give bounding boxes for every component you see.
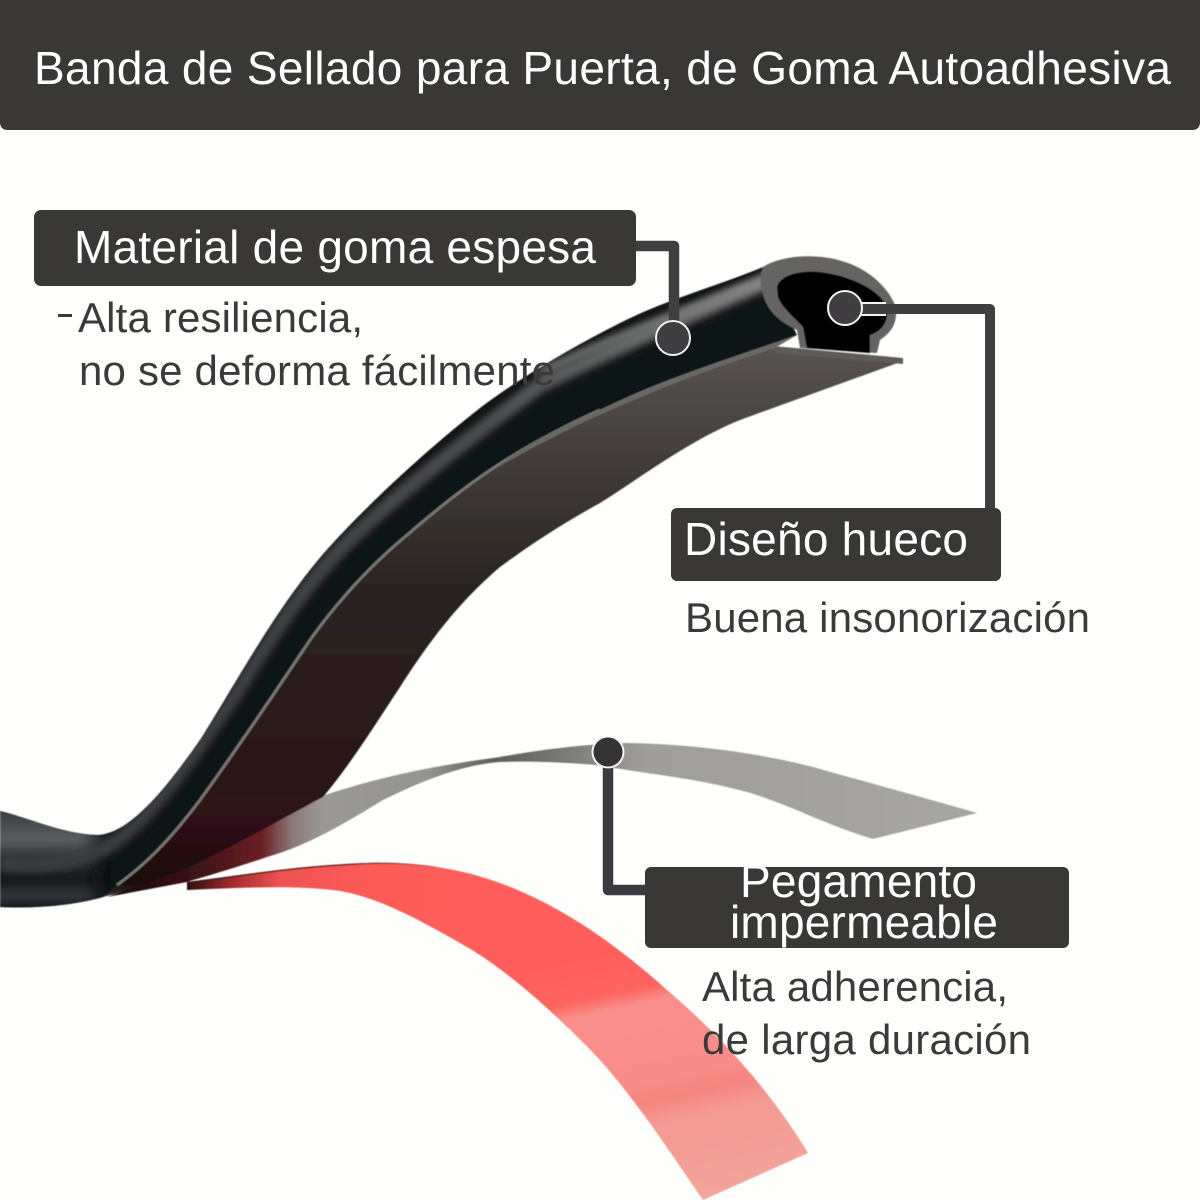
label text: Pegamento [740, 855, 977, 907]
callout: diseño hueco [671, 291, 1090, 641]
callout: pegamento impermeable [592, 736, 1069, 1063]
label text: impermeable [730, 896, 998, 948]
gray backing film [107, 743, 977, 897]
label text: Material de goma espesa [74, 221, 596, 273]
marker dot [592, 736, 624, 768]
connector line [608, 760, 650, 890]
connector halo [845, 302, 886, 316]
description: Alta adherencia, [702, 963, 1008, 1010]
base edge strip [773, 346, 903, 364]
tube end: outer rim [761, 256, 896, 353]
gray seam line [117, 410, 600, 885]
description: Buena insonorización [685, 594, 1090, 641]
header bar [0, 0, 1200, 130]
title: Banda de Sellado para Puerta, de Goma Autoadhesiva [34, 42, 1171, 94]
label box [645, 867, 1069, 948]
description: de larga duración [702, 1016, 1031, 1063]
seam band near tube end [500, 335, 797, 466]
description: Alta resiliencia, [78, 294, 363, 341]
callout: material de goma espesa [34, 210, 690, 394]
label text: Diseño hueco [684, 513, 968, 565]
flat adhesive base [103, 335, 903, 897]
tube end: hollow cavity [777, 272, 887, 353]
label box [671, 508, 1001, 581]
marker dot [656, 321, 690, 355]
connector line [630, 246, 674, 335]
description dash [58, 314, 72, 317]
label box [34, 210, 636, 286]
label text [730, 855, 998, 948]
illustration: sealing strip [0, 256, 977, 1200]
red adhesive liner [180, 850, 820, 1200]
rubber tube body [0, 267, 797, 907]
description: no se deforma fácilmente [79, 347, 555, 394]
description [78, 294, 555, 394]
tube highlights [0, 277, 770, 910]
marker dot [828, 291, 862, 325]
connector line [845, 309, 990, 515]
description [702, 963, 1031, 1063]
